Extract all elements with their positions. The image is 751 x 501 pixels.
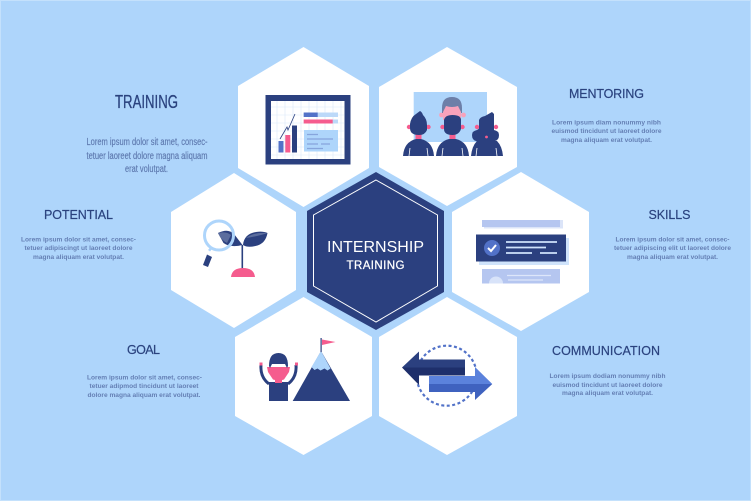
hexagon: skills: [452, 172, 589, 331]
icon: chart board: [266, 95, 350, 164]
text: training: Lorem ipsum dolor sit amet, consec-: [86, 137, 208, 148]
text: potential: tetuer adipiscingt ut laoreet dolore: [24, 245, 133, 252]
text: communication: euismod tincidunt ut laoreet dolore: [552, 382, 663, 389]
text: goal: dolore magna aliquam erat volutpat.: [88, 392, 201, 399]
text: training: [86, 92, 208, 175]
person left: [403, 111, 434, 156]
text: communication: COMMUNICATION: [552, 344, 660, 358]
text: mentoring: Lorem ipsum diam nonummy nibh: [552, 120, 661, 126]
text: potential: POTENTIAL: [44, 208, 113, 222]
text: skills: [614, 208, 731, 261]
text: potential: Lorem ipsum dolor sit amet, consec-: [21, 236, 136, 244]
text: mentoring: MENTORING: [569, 87, 644, 101]
person right: [471, 112, 503, 156]
text: mentoring: [552, 87, 662, 144]
hexagon: training: [238, 47, 369, 207]
icon: exchange arrows: [402, 346, 492, 406]
text: mentoring: euismod tincidunt ut laoreet dolore: [552, 128, 662, 135]
text: communication: magna aliquam erat volutpat.: [562, 390, 653, 397]
text: training: TRAINING: [115, 92, 178, 112]
icon: raised-arms person: [260, 353, 298, 401]
icon: skills cards: [476, 220, 569, 284]
icon: mountain with flag: [293, 338, 350, 401]
text: communication: Lorem ipsum dodiam nonummy nibh: [550, 373, 666, 380]
hexagon: mentoring: [379, 47, 517, 206]
hexagon: goal: [235, 297, 372, 455]
text: training: erat volutpat.: [125, 164, 168, 175]
text: potential: [21, 208, 136, 261]
text: skills: SKILLS: [648, 208, 690, 222]
center subtitle: TRAINING: [346, 260, 405, 272]
hexagon: potential: [171, 173, 296, 328]
icon: mentoring people: [403, 92, 503, 156]
text: training: tetuer laoreet dolore magna aliquam: [86, 151, 208, 162]
mentor: [439, 97, 466, 120]
text: potential: magna aliquam erat volutpat.: [33, 254, 124, 261]
text: mentoring: magna aliquam erat volutpat.: [561, 137, 652, 144]
text: goal: [87, 343, 202, 399]
icon: magnifier and sprout: [203, 221, 268, 277]
person middle: [436, 115, 469, 156]
text: goal: tetuer adipmod tincidunt ut laoreet: [90, 383, 199, 390]
text: skills: Lorem ipsum dolor sit amet, consec-: [616, 236, 730, 244]
text: goal: GOAL: [127, 343, 160, 357]
text: skills: tetuer adipiscing elit ut laoreet dolore: [614, 245, 731, 252]
center hexagon: [307, 172, 444, 330]
text: communication: [550, 344, 666, 397]
text: goal: Lorem ipsum dolor sit amet, consec-: [87, 374, 202, 382]
center title: INTERNSHIP: [327, 239, 424, 256]
hexagon: communication: [379, 297, 517, 455]
text: skills: magna aliquam erat volutpat.: [627, 254, 718, 261]
